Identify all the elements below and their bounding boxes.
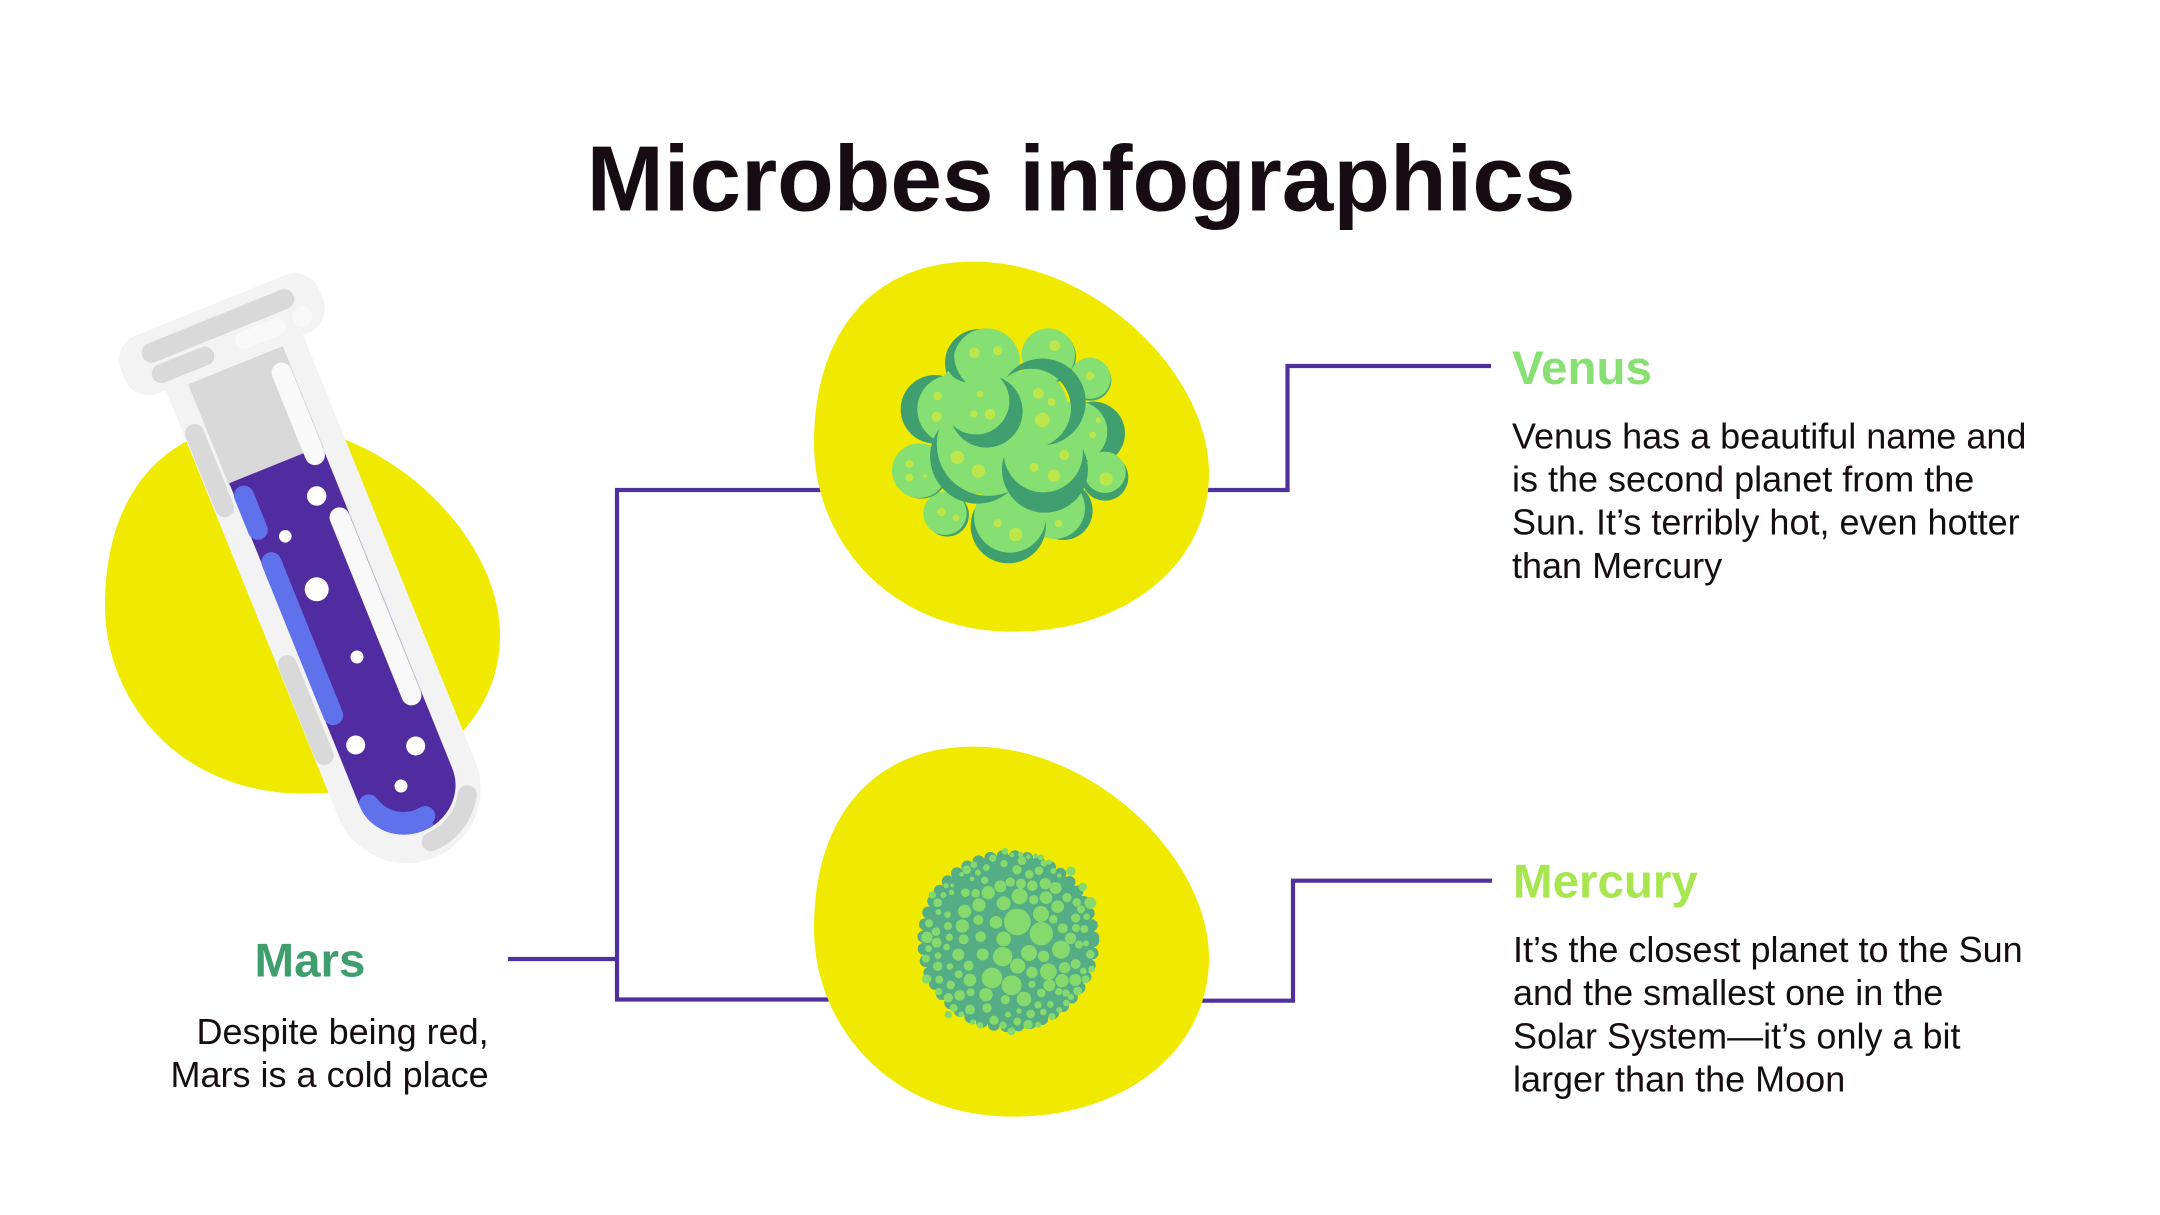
text block: Venus: than Mercury <box>1512 545 1722 586</box>
text block: Mercury: Mercury <box>1513 856 1698 908</box>
text block: Mars: Despite being red, <box>197 1011 489 1052</box>
text block: Mars <box>171 934 489 1095</box>
text block: Mars: Mars is a cold place <box>171 1054 489 1095</box>
text block: Mercury: Solar System—it’s only a bit <box>1513 1015 1961 1056</box>
icon: Mercury microbe <box>922 849 1096 1035</box>
icon: Venus microbe <box>892 328 1128 563</box>
blob: Mercury background <box>814 747 1209 1117</box>
text block: Mars: Mars <box>255 934 365 988</box>
text block: Venus: is the second planet from the <box>1512 458 1974 500</box>
blob: Mars background <box>105 424 500 794</box>
text block: Venus: Venus has a beautiful name and <box>1512 415 2026 456</box>
text block: Venus: Sun. It’s terribly hot, even hotter <box>1512 502 2020 543</box>
title: Microbes infographics <box>587 126 1575 230</box>
icon: test tube <box>119 273 480 863</box>
connector lines <box>508 366 1492 1001</box>
text block: Mercury: and the smallest one in the <box>1513 972 1943 1013</box>
text block: Venus <box>1512 342 2026 586</box>
text block: Mercury <box>1513 856 2023 1100</box>
text block: Venus: Venus <box>1512 342 1652 395</box>
blob: Venus background <box>814 262 1209 632</box>
text block: Mercury: It’s the closest planet to the Sun <box>1513 929 2023 970</box>
text block: Mercury: larger than the Moon <box>1513 1059 1845 1100</box>
